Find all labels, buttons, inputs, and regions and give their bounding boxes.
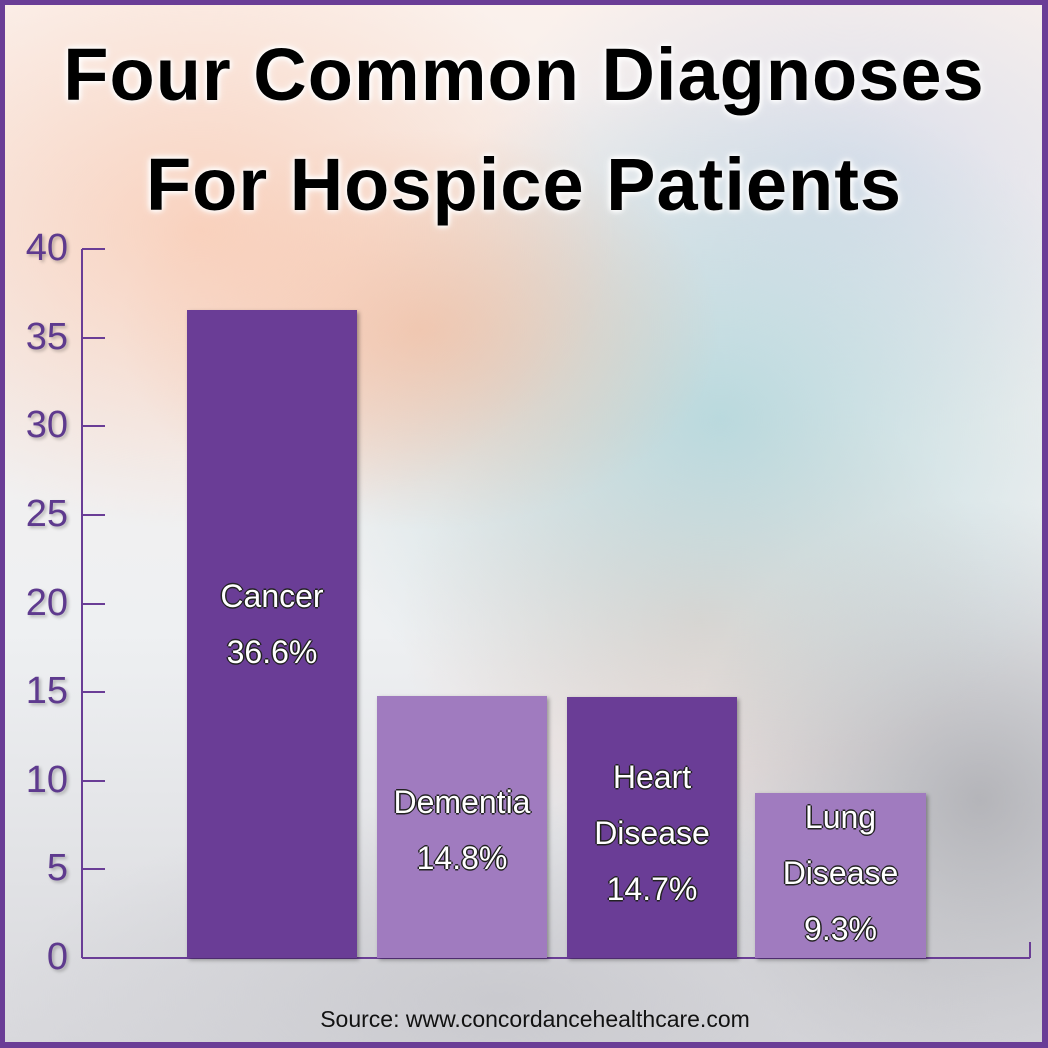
y axis [26,227,1031,978]
bar: lung disease: 9.3% [804,911,877,947]
y axis: 10 [26,759,68,801]
bar: heart disease: Disease [594,815,710,851]
title: For Hospice Patients [146,143,902,226]
y axis: 20 [26,582,68,624]
bar: cancer: 36.6% [227,634,317,670]
bar: lung disease: Lung [805,799,876,835]
y axis: 30 [26,404,68,446]
bar: heart disease: 14.7% [607,871,697,907]
bar: lung disease: Disease [783,855,898,891]
bar: heart disease: Heart [613,759,691,795]
y axis: 40 [26,227,68,269]
bar: cancer: Cancer [220,578,324,614]
bar: lung disease [755,793,926,958]
y axis: 35 [26,316,68,358]
bar: cancer [187,310,357,958]
bar: dementia [377,696,547,958]
bar: heart disease [567,697,737,958]
title: Four Common Diagnoses [63,33,985,116]
y axis: 5 [47,847,68,889]
title [63,33,985,230]
y axis: 25 [26,493,68,535]
bar: dementia: Dementia [394,784,530,820]
y axis: 0 [47,936,68,978]
y axis: 15 [26,670,68,712]
bar: dementia: 14.8% [417,840,507,876]
source: Source: www.concordancehealthcare.com [320,1006,750,1032]
